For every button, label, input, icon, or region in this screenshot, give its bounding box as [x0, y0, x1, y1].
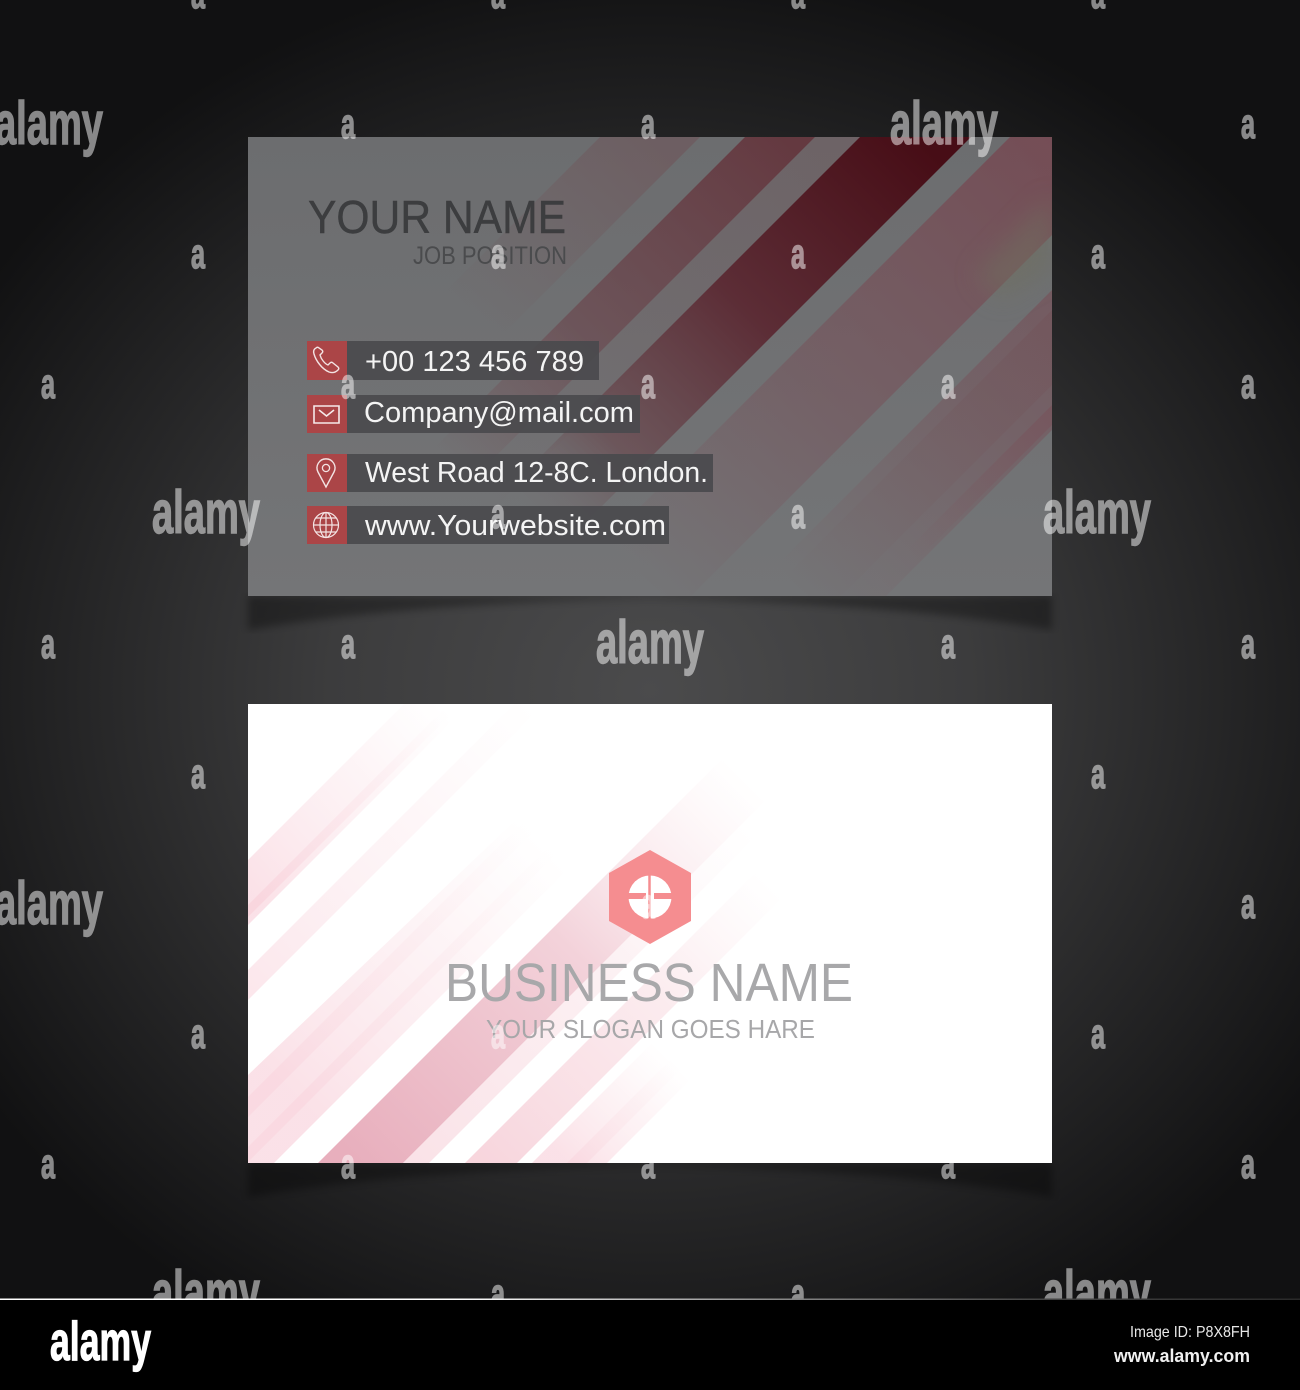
icon: globe [314, 512, 338, 538]
watermark overlay: a [791, 1270, 805, 1317]
card base [248, 704, 1052, 1163]
watermark overlay: a [641, 100, 655, 147]
watermark overlay: a [1091, 1010, 1105, 1057]
watermark overlay: a [791, 490, 805, 537]
job position: JOB POSITION [413, 242, 567, 270]
watermark overlay: a [491, 1270, 505, 1317]
watermark overlay: a [341, 1140, 355, 1187]
watermark overlay: a [941, 1140, 955, 1187]
icon: phone [314, 347, 339, 373]
card base [248, 137, 1052, 596]
watermark overlay: a [641, 1140, 655, 1187]
diagonal red stripes [488, 137, 1052, 552]
street address: West Road 12-8C. London. [365, 457, 708, 489]
watermark overlay: a [41, 360, 55, 407]
watermark overlay: a [641, 880, 655, 927]
watermark overlay: a [1241, 620, 1255, 667]
watermark overlay: alamy [1043, 1259, 1151, 1326]
business name: BUSINESS NAME [445, 953, 853, 1013]
watermark overlay: alamy [152, 1259, 260, 1326]
watermark overlay: a [491, 490, 505, 537]
slogan: YOUR SLOGAN GOES HARE [486, 1014, 815, 1044]
watermark overlay: a [341, 620, 355, 667]
watermark overlay: a [191, 230, 205, 277]
watermark overlay: a [491, 1010, 505, 1057]
address row [307, 454, 713, 492]
footer bar [0, 1298, 1300, 1390]
watermark overlay: a [941, 620, 955, 667]
shadow under front card [248, 596, 1052, 630]
watermark overlay: a [1091, 750, 1105, 797]
watermark overlay: a [791, 230, 805, 277]
phone row [307, 341, 599, 380]
watermark overlay: a [191, 1010, 205, 1057]
watermark overlay: a [41, 1140, 55, 1187]
website address: www.Yourwebsite.com [364, 510, 666, 542]
watermark overlay: a [191, 750, 205, 797]
website row [307, 506, 669, 544]
site url: www.alamy.com [1113, 1346, 1250, 1366]
icon: envelope [314, 406, 339, 423]
watermark overlay: a [341, 100, 355, 147]
watermark overlay: a [491, 230, 505, 277]
footer logo: alamy [50, 1310, 151, 1372]
watermark overlay: alamy [596, 609, 704, 676]
shadow under back card [248, 1163, 1052, 1197]
watermark overlay: alamy [0, 90, 103, 157]
watermark overlay: a [341, 360, 355, 407]
watermark overlay: a [1241, 360, 1255, 407]
watermark overlay: a [1241, 100, 1255, 147]
panel: contact card [248, 137, 1052, 596]
watermark overlay: a [641, 360, 655, 407]
watermark overlay: a [1091, 230, 1105, 277]
name heading: YOUR NAME [308, 191, 566, 243]
watermark overlay: a [941, 360, 955, 407]
panel: logo card [248, 683, 1052, 1170]
watermark overlay: a [1241, 880, 1255, 927]
image id: Image ID: P8X8FH [1130, 1324, 1250, 1341]
watermark overlay: alamy [890, 90, 998, 157]
watermark overlay: alamy [152, 479, 260, 546]
icon: location pin [317, 459, 335, 487]
logo: hexagon emblem [609, 850, 691, 944]
watermark overlay: a [41, 620, 55, 667]
phone number: +00 123 456 789 [365, 346, 584, 378]
watermark overlay: a [1241, 1140, 1255, 1187]
watermark overlay: alamy [1043, 479, 1151, 546]
diagonal pink stripes [248, 742, 728, 1163]
watermark overlay: alamy [0, 870, 103, 937]
email address: Company@mail.com [364, 397, 634, 429]
email row [307, 395, 640, 433]
